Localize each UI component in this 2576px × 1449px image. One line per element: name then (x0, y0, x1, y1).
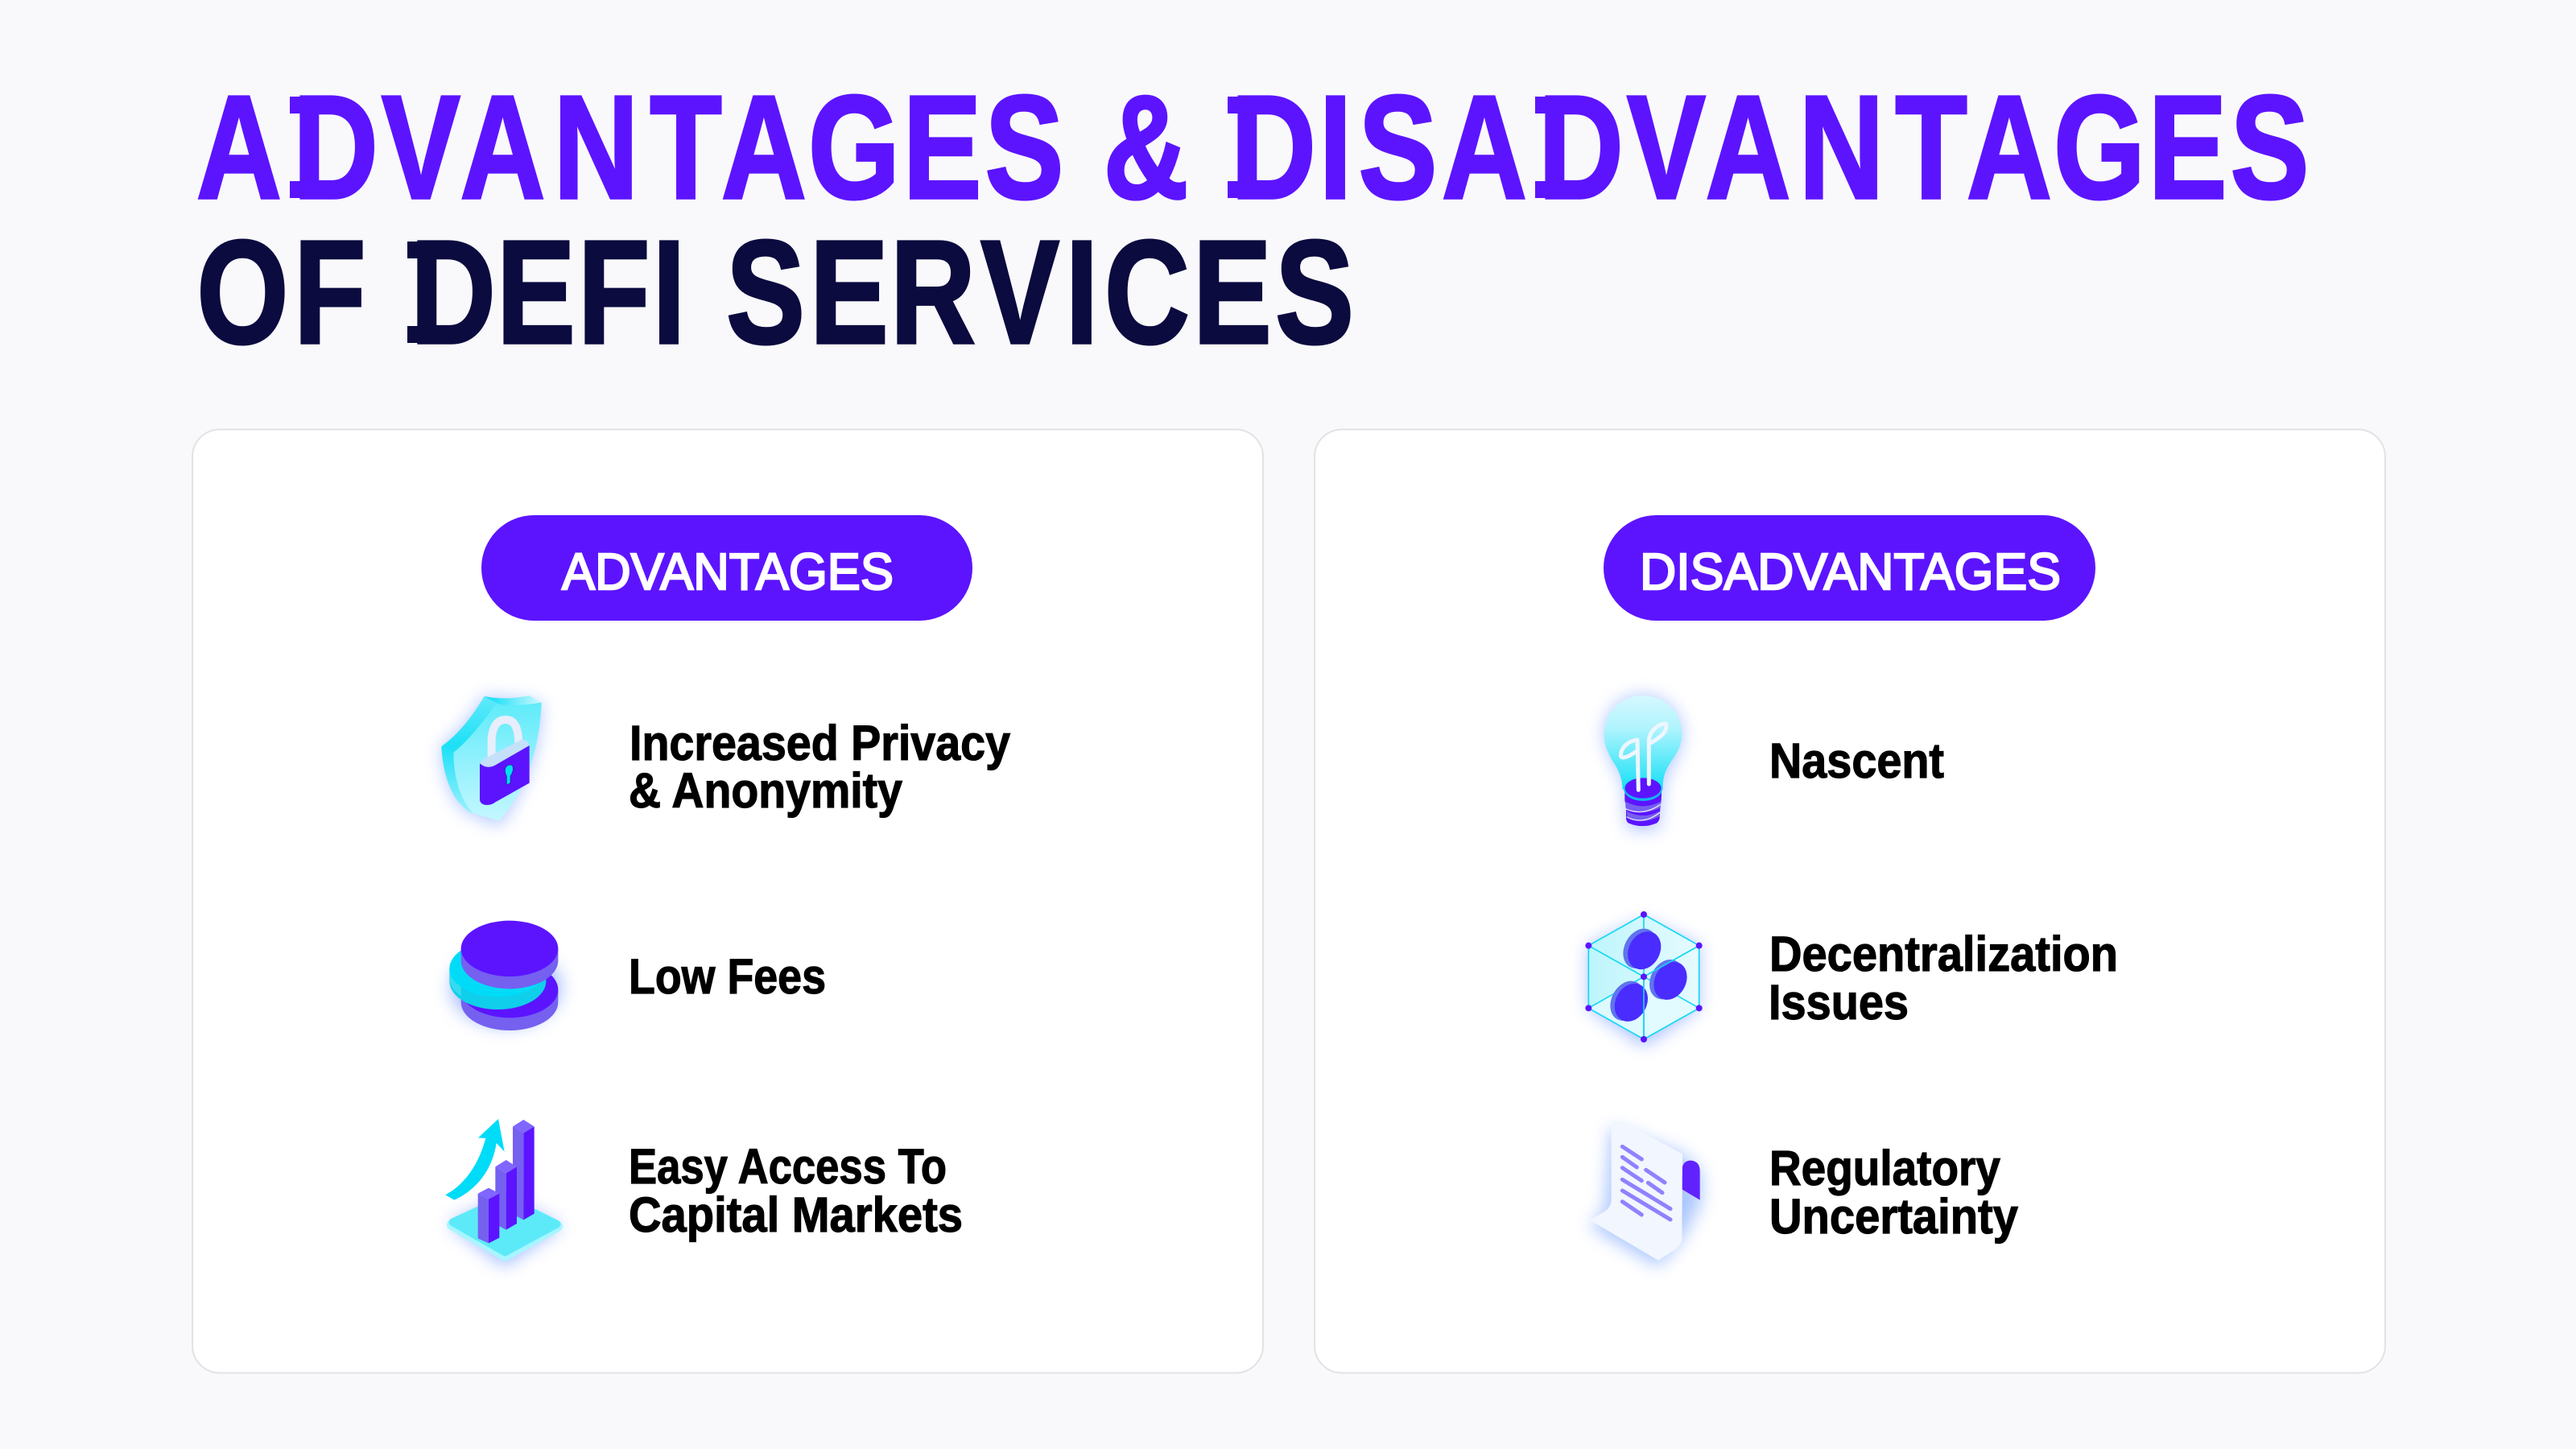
disadvantage text: regulatory uncertainty: Regulatory (1769, 1141, 2000, 1195)
icon: bar chart with arrow (445, 1119, 562, 1266)
icon: coin stack (449, 921, 561, 1030)
disadvantage text: decentralization: Decentralization (1769, 927, 2118, 981)
title line 2: OF (196, 210, 365, 375)
title line 1: DISADVANTAGES (1231, 65, 2309, 230)
title line 2: SERVICES (726, 210, 1354, 375)
title line 2 (196, 210, 1354, 375)
disadvantage text: decentralization: Issues (1769, 975, 1909, 1030)
advantages pill: ADVANTAGES (562, 543, 894, 601)
title line 1: & (1104, 65, 1188, 230)
title line 2: DEFI (411, 210, 685, 375)
panel: disadvantages (1315, 430, 2385, 1373)
advantage text: easy access: Capital Markets (629, 1187, 963, 1242)
disadvantage text: regulatory uncertainty: Uncertainty (1769, 1189, 2018, 1244)
advantage text: increased privacy: Increased Privacy (630, 716, 1010, 770)
advantage text: increased privacy: & Anonymity (629, 763, 902, 818)
disadvantage text: nascent: Nascent (1769, 733, 1944, 788)
disadvantages pill (1604, 515, 2095, 621)
advantage text: low fees: Low Fees (629, 949, 826, 1004)
advantages pill (481, 515, 972, 621)
advantage text: easy access (629, 1139, 963, 1242)
disadvantages pill: DISADVANTAGES (1640, 543, 2061, 601)
icon: light bulb with sprout (1604, 696, 1682, 830)
icon: document scroll (1590, 1121, 1701, 1266)
title (196, 65, 2309, 375)
icon: shield with padlock (441, 696, 542, 826)
advantage text: easy access: Easy Access To (629, 1139, 947, 1194)
panel: advantages (192, 430, 1263, 1373)
advantage text: increased privacy (629, 716, 1010, 818)
disadvantage text: regulatory uncertainty (1769, 1141, 2018, 1244)
title line 1 (196, 65, 2309, 230)
icon: network cube (1585, 911, 1703, 1046)
disadvantage text: decentralization (1769, 927, 2118, 1030)
title line 1: ADVANTAGES (196, 65, 1063, 230)
